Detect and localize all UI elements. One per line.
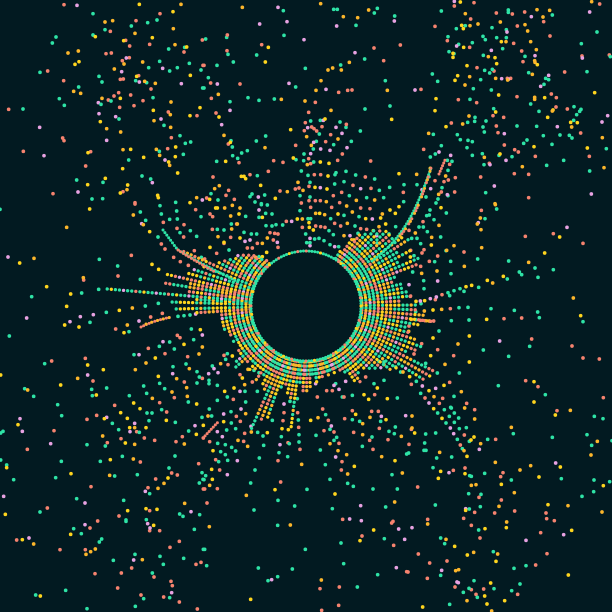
scattered dots: bottom right <box>408 408 612 611</box>
scattered dots: bottom centre <box>204 409 407 610</box>
dense radial rays <box>107 229 436 428</box>
short streak: bottom left <box>203 421 219 438</box>
scattered dots: below the ring <box>209 354 403 404</box>
scattered dots: left <box>0 204 202 405</box>
scattered dots: top left <box>9 4 203 203</box>
scattered dots: top centre <box>204 4 404 204</box>
scattered dots: right <box>409 205 603 407</box>
scattered dots: above the ring, with stem and hook <box>205 205 399 259</box>
scattered dots: top right <box>415 1 610 204</box>
scattered dots: bottom left <box>1 409 203 609</box>
central void <box>253 253 359 359</box>
inner dotted ring <box>251 251 361 361</box>
curved streak: upper left <box>163 230 240 283</box>
curved streak: lower left <box>141 317 172 327</box>
curved streak: upper right <box>372 160 445 261</box>
